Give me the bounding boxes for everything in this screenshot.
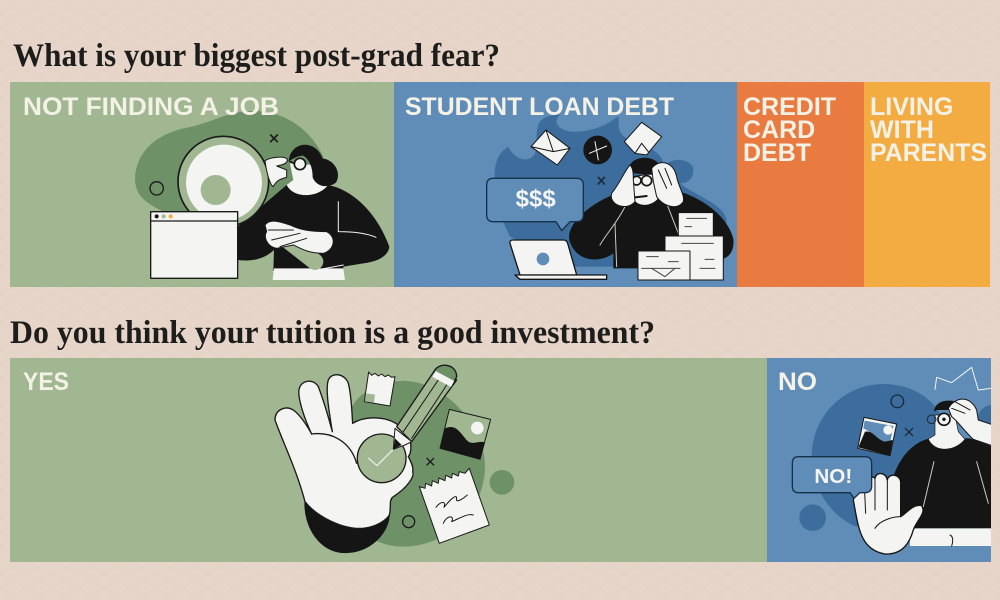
label: living with parents: PARENTS — [870, 139, 987, 167]
illustration: ok hand with pencil and notes — [275, 365, 514, 553]
label: yes: YES — [23, 368, 69, 396]
heading: biggest post-grad fear: What is your biggest post-grad fear? — [13, 38, 500, 74]
illustration: stressed student with bills — [487, 115, 734, 280]
illustration: student with raised hand saying no — [792, 367, 1000, 554]
panel: not finding a job — [10, 82, 394, 287]
label: living with parents: WITH — [870, 116, 934, 144]
illustration: woman with magnifying glass — [135, 111, 389, 280]
label: credit card debt: CREDIT — [743, 93, 836, 121]
label: dollar signs: $$$ — [516, 186, 556, 213]
panel: yes — [10, 358, 767, 562]
label: credit card debt: DEBT — [743, 139, 811, 167]
label: no: NO — [778, 368, 817, 396]
label: not finding a job: NOT FINDING A JOB — [23, 93, 279, 121]
panel: student loan debt — [394, 82, 737, 287]
heading: tuition investment: Do you think your tuition is a good investment? — [10, 315, 655, 351]
panel: credit card debt — [737, 82, 864, 287]
label: credit card debt: CARD — [743, 116, 815, 144]
panel: living with parents — [864, 82, 990, 287]
panel: no — [767, 358, 1000, 562]
label: no exclamation: NO! — [814, 465, 852, 488]
label: student loan debt: STUDENT LOAN DEBT — [405, 93, 674, 121]
label: living with parents: LIVING — [870, 93, 953, 121]
